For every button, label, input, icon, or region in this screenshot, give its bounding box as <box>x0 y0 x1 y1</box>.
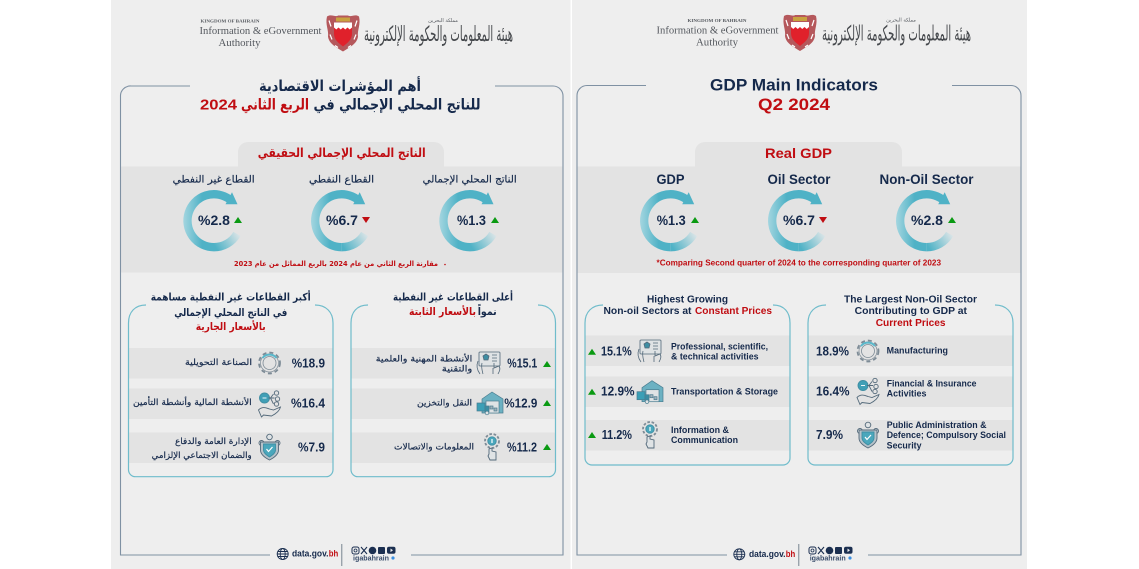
panel: highest growing non-oil sectors: Highest Growing <box>647 294 728 306</box>
panel: Arabic highest growing sectors: نمواً <box>478 304 497 318</box>
text: هيئة المعلومات والحكومة الإلكترونية <box>364 22 513 46</box>
footer: English panel <box>734 544 852 566</box>
indicator: GDP Arabic: %1.3 <box>457 213 486 228</box>
indicator: oil sector English <box>768 172 831 247</box>
title: English: Q2 2024 <box>758 95 831 114</box>
indicator: oil sector English: Oil Sector <box>768 172 831 187</box>
indicator: non-oil sector English <box>880 172 974 247</box>
panel: highest growing non-oil sectors: Information & <box>671 425 730 435</box>
indicator: GDP English <box>644 172 699 247</box>
indicator: non-oil sector Arabic: %2.8 <box>198 213 231 228</box>
footer: Arabic panel <box>277 544 396 566</box>
indicator: GDP English: GDP <box>656 172 684 187</box>
panel: highest growing non-oil sectors: Professional, scientific, <box>671 341 768 351</box>
header: Arabic panel logos: KINGDOM OF BAHRAIN <box>200 18 260 24</box>
title: Arabic: أهم المؤشرات الاقتصادية <box>259 76 421 95</box>
footnote: Arabic: مقارنة الربع الثاني من عام 2024 بالربع المماثل من عام 2023 <box>234 260 438 268</box>
indicator: oil sector English: %6.7 <box>783 213 815 228</box>
heading: real GDP English: Real GDP <box>765 145 832 161</box>
panel: largest non-oil sector contributors: Activities <box>887 389 927 399</box>
panel: Arabic largest contributors: بالأسعار الجارية <box>196 320 266 333</box>
panel: largest non-oil sector contributors: Current Prices <box>876 317 946 329</box>
indicator: GDP Arabic: الناتج المحلي الإجمالي <box>423 174 517 186</box>
header: English panel logos <box>656 15 971 51</box>
title: English <box>710 76 878 114</box>
title: Arabic: للناتج المحلي الإجمالي في <box>314 96 480 114</box>
indicator: non-oil sector Arabic: القطاع غير النفطي <box>173 174 255 186</box>
band: real GDP English <box>577 142 1021 273</box>
panel: Arabic highest growing sectors: أعلى القطاعات غير النفطية <box>393 290 513 304</box>
panel: highest growing non-oil sectors: Non-oil Sectors at <box>604 305 692 317</box>
panel: Arabic highest growing sectors <box>351 290 556 477</box>
footer: English panel: data.gov. <box>749 549 786 559</box>
footnote: English: *Comparing Second quarter of 2024 to the corresponding quarter of 2023 <box>656 259 942 268</box>
panel: largest non-oil sector contributors: 7.9% <box>816 428 843 442</box>
header: Arabic panel logos: Authority <box>218 38 261 49</box>
panel: Arabic largest contributors: الأنشطة المالية وأنشطة التأمين <box>133 396 252 408</box>
panel: largest non-oil sector contributors: 18.9% <box>816 344 849 358</box>
indicator: oil sector Arabic: القطاع النفطي <box>309 174 374 186</box>
footer: English panel: igabahrain <box>810 554 846 563</box>
panel: Arabic largest contributors <box>128 290 333 477</box>
header: Arabic panel logos <box>200 15 513 52</box>
panel: largest non-oil sector contributors: Manufacturing <box>887 346 948 356</box>
panel: Arabic largest contributors: الصناعة التحويلية <box>185 358 252 368</box>
footer: Arabic panel: bh <box>329 549 338 559</box>
footer: Arabic panel: data.gov. <box>292 549 328 559</box>
panel: Arabic highest growing sectors: %15.1 <box>507 356 537 370</box>
panel: largest non-oil sector contributors <box>808 294 1013 465</box>
panel: Arabic largest contributors: الإدارة العامة والدفاع <box>175 437 252 447</box>
title: Arabic: 2024 <box>200 98 237 114</box>
indicator: GDP English: %1.3 <box>657 213 686 228</box>
panel: largest non-oil sector contributors: Defence; Compulsory Social <box>887 430 1006 440</box>
panel: highest growing non-oil sectors: Communication <box>671 435 738 445</box>
panel: Arabic highest growing sectors: %11.2 <box>507 440 537 454</box>
panel: Arabic largest contributors: %18.9 <box>292 356 325 370</box>
panel: Arabic highest growing sectors: المعلومات والاتصالات <box>394 442 474 452</box>
header: English panel logos: Information & eGovernment <box>656 26 779 36</box>
header: Arabic panel logos: مملكة البحرين <box>428 18 458 24</box>
header: English panel logos: KINGDOM OF BAHRAIN <box>688 18 747 23</box>
title: English: GDP Main Indicators <box>710 76 878 94</box>
panel: Arabic highest growing sectors: الأنشطة المهنية والعلمية <box>376 353 472 364</box>
indicator: GDP Arabic <box>423 174 517 247</box>
indicator: oil sector Arabic <box>309 174 374 247</box>
indicator: oil sector Arabic: %6.7 <box>326 213 358 228</box>
panel: Arabic highest growing sectors: %12.9 <box>504 396 537 410</box>
band: real GDP Arabic <box>121 142 563 272</box>
panel: Arabic highest growing sectors: النقل والتخزين <box>417 399 472 409</box>
indicator: non-oil sector English: Non-Oil Sector <box>880 172 974 187</box>
indicator: non-oil sector Arabic <box>173 174 255 247</box>
heading: real GDP Arabic: الناتج المحلي الإجمالي الحقيقي <box>258 145 426 160</box>
panel: largest non-oil sector contributors: Security <box>887 440 922 450</box>
panel: Arabic largest contributors: أكبر القطاعات غير النفطية مساهمة <box>151 290 311 304</box>
panel: highest growing non-oil sectors: 11.2% <box>602 428 632 442</box>
panel: largest non-oil sector contributors: Contributing to GDP at <box>855 305 967 317</box>
panel: Arabic infographic <box>111 0 570 569</box>
text: هيئة المعلومات والحكومة الإلكترونية <box>822 22 971 46</box>
panel: Arabic largest contributors: والضمان الاجتماعي الإلزامي <box>152 451 252 461</box>
header: English panel logos: مملكة البحرين <box>886 18 916 24</box>
panel: English infographic <box>572 0 1027 569</box>
footer: Arabic panel: igabahrain <box>353 554 389 562</box>
footer: English panel: bh <box>786 549 795 559</box>
panel: largest non-oil sector contributors: Public Administration & <box>887 420 987 430</box>
header: English panel logos: Authority <box>696 38 739 48</box>
panel: highest growing non-oil sectors <box>585 294 790 465</box>
panel: highest growing non-oil sectors: Constant Prices <box>695 305 772 317</box>
panel: highest growing non-oil sectors: Transportation & Storage <box>671 387 778 397</box>
panel: Arabic largest contributors: في الناتج المحلي الإجمالي <box>174 307 287 319</box>
frame: English panel <box>577 86 1021 555</box>
panel: Arabic largest contributors: %7.9 <box>298 440 325 454</box>
panel: largest non-oil sector contributors: The Largest Non-Oil Sector <box>844 294 977 306</box>
panel: highest growing non-oil sectors: 12.9% <box>601 384 635 398</box>
title: Arabic <box>200 76 480 114</box>
panel: largest non-oil sector contributors: Financial & Insurance <box>887 379 977 389</box>
frame: Arabic panel <box>120 86 563 555</box>
panel: highest growing non-oil sectors: 15.1% <box>601 344 632 358</box>
panel: Arabic highest growing sectors: بالأسعار الثابتة <box>409 305 476 318</box>
panel: largest non-oil sector contributors: 16.4% <box>816 384 850 398</box>
panel: Arabic largest contributors: %16.4 <box>291 396 325 410</box>
panel: highest growing non-oil sectors: & technical activities <box>671 351 759 361</box>
title: Arabic: الربع الثاني <box>241 96 309 114</box>
header: Arabic panel logos: Information & eGovernment <box>200 26 322 37</box>
indicator: non-oil sector English: %2.8 <box>911 213 944 228</box>
panel: Arabic highest growing sectors: والتقنية <box>442 364 472 374</box>
